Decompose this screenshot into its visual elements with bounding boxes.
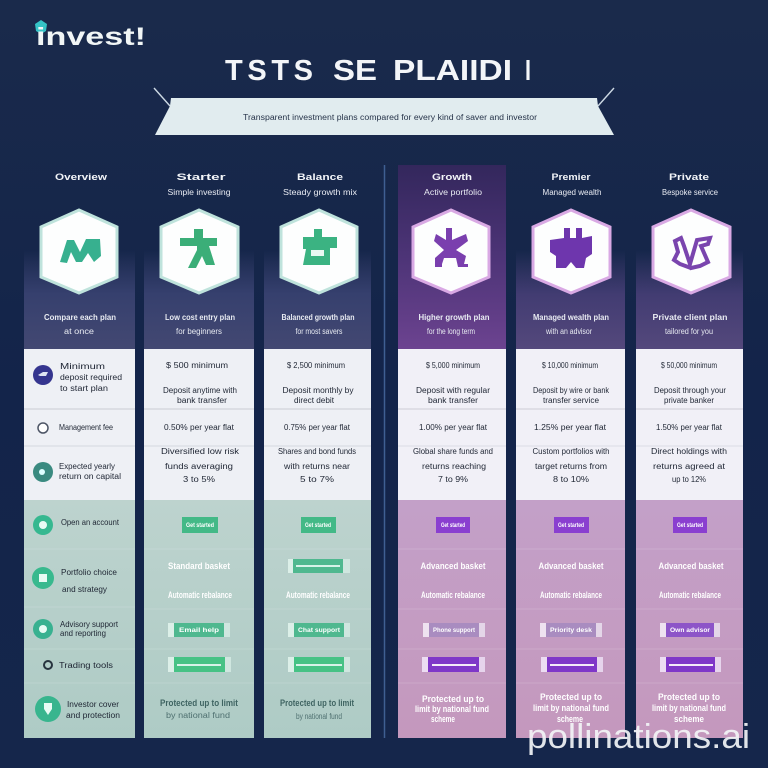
column heading: Starter <box>176 172 226 182</box>
plan values: 5 to 7% <box>300 475 334 484</box>
header description: for most savers <box>296 327 342 336</box>
plan values: 8 to 10% <box>553 475 589 484</box>
tinted values <box>420 561 486 600</box>
plan values: funds averaging <box>165 462 233 471</box>
plan values: Deposit anytime with <box>163 386 237 395</box>
header description: for beginners <box>176 327 222 336</box>
protection note: scheme <box>557 714 583 724</box>
plan values: 1.00% per year flat <box>419 423 488 432</box>
column heading <box>168 172 230 197</box>
header description: for the long term <box>427 327 475 336</box>
header description: Private client plan <box>652 313 728 322</box>
row label: returns: Expected yearly <box>59 462 115 471</box>
column: plan 4 (highlighted) <box>398 165 506 738</box>
chip: tools <box>660 657 721 672</box>
button <box>554 517 589 533</box>
column heading <box>662 172 719 197</box>
plan values: direct debit <box>294 396 335 405</box>
row label: protection: Investor cover <box>67 700 119 709</box>
column heading: Simple investing <box>168 188 230 197</box>
row label: protection: and protection <box>66 711 120 720</box>
title: I <box>525 55 531 87</box>
button <box>436 517 470 533</box>
protection note <box>280 698 354 721</box>
title: PLAIIDI <box>393 55 512 87</box>
column: plan 3 <box>264 172 371 738</box>
plan values: Deposit monthly by <box>282 386 354 395</box>
row label: tools <box>44 661 113 670</box>
chip: support <box>168 623 230 637</box>
hexagon icon <box>413 210 489 293</box>
header description: tailored for you <box>665 327 713 336</box>
header description <box>44 313 116 336</box>
protection note: Protected up to <box>422 694 484 704</box>
chip: basket <box>288 559 350 573</box>
plan values <box>651 361 727 484</box>
column heading: Active portfolio <box>424 188 483 197</box>
plan values: private banker <box>664 396 714 405</box>
plan values: 7 to 9% <box>438 475 468 484</box>
header description: Balanced growth plan <box>282 313 355 322</box>
logo wordmark: invest! <box>36 23 146 51</box>
row label: risk: Portfolio choice <box>61 568 118 577</box>
row label: tools: Trading tools <box>59 661 113 670</box>
header description <box>165 313 235 336</box>
plan values: bank transfer <box>177 396 227 405</box>
title: SE <box>333 55 377 87</box>
header description: Higher growth plan <box>418 313 490 322</box>
hexagon icon <box>161 210 238 293</box>
row label: support: and reporting <box>60 629 106 638</box>
header description <box>533 313 609 336</box>
chip: support <box>540 623 602 637</box>
header description <box>418 313 490 336</box>
tinted values <box>658 561 724 600</box>
plan values: Custom portfolios with <box>532 447 610 456</box>
tinted values: Automatic rebalance <box>421 590 485 600</box>
row label: returns: return on capital <box>59 472 121 481</box>
header description: Low cost entry plan <box>165 313 235 322</box>
protection note: Protected up to limit <box>280 698 354 708</box>
watermark: pollinations.ai <box>527 718 750 756</box>
plan values <box>532 361 610 484</box>
chip: tools <box>168 657 231 672</box>
header description: with an advisor <box>545 327 592 336</box>
header description <box>652 313 728 336</box>
tinted values: Advanced basket <box>658 561 724 571</box>
plan values: Global share funds and <box>413 447 493 456</box>
button: Get started <box>677 523 703 529</box>
header description: Compare each plan <box>44 313 116 322</box>
plan values: 0.75% per year flat <box>284 423 351 432</box>
row label: returns <box>33 462 121 482</box>
button: Get started <box>186 523 214 529</box>
row label: fees <box>38 423 113 433</box>
plan values: Diversified low risk <box>161 447 240 456</box>
protection note: Protected up to limit <box>160 698 238 708</box>
row label: risk <box>32 567 118 594</box>
row label: risk: and strategy <box>62 585 107 594</box>
protection note <box>415 694 489 724</box>
chip: support <box>660 623 720 637</box>
column heading: Bespoke service <box>662 188 719 197</box>
column: plan features <box>24 172 135 738</box>
protection note <box>533 692 609 724</box>
header description: Managed wealth plan <box>533 313 609 322</box>
chip: support: Own advisor <box>670 628 711 634</box>
title <box>225 55 531 87</box>
row label: fees: Management fee <box>59 423 113 432</box>
column heading: Overview <box>55 172 108 182</box>
plan values: with returns near <box>283 462 350 471</box>
chip: tools <box>422 657 485 672</box>
header description: at once <box>64 327 95 336</box>
column heading <box>542 172 602 197</box>
tinted values: Advanced basket <box>420 561 486 571</box>
protection note: scheme <box>431 714 455 724</box>
subtitle ribbon <box>154 88 614 135</box>
ribbon caption: Transparent investment plans compared for every kind of saver and investor <box>243 113 537 122</box>
row label: protection <box>35 696 120 722</box>
chip: support <box>423 623 485 637</box>
plan values: returns agreed at <box>653 462 726 471</box>
protection note: scheme <box>674 714 704 724</box>
tinted values: Advanced basket <box>538 561 604 571</box>
plan values: $ 10,000 minimum <box>542 361 598 370</box>
hexagon icon <box>533 210 610 293</box>
plan values: $ 5,000 minimum <box>426 361 480 370</box>
logo <box>35 20 146 51</box>
tinted values: Standard basket <box>168 561 230 571</box>
plan values <box>278 361 356 484</box>
plan values: $ 50,000 minimum <box>661 361 717 370</box>
plan values: Direct holdings with <box>651 447 727 456</box>
column heading: Growth <box>432 172 472 182</box>
tinted values <box>168 561 232 600</box>
column heading: Steady growth mix <box>283 188 357 197</box>
protection note: by national fund <box>296 712 342 721</box>
button: Get started <box>441 523 465 529</box>
button: Get started <box>558 523 584 529</box>
plan values <box>413 361 493 484</box>
column heading: Private <box>669 172 709 182</box>
chip: tools <box>541 657 603 672</box>
plan values: 0.50% per year flat <box>164 423 235 432</box>
row label: minimum: to start plan <box>60 384 108 393</box>
chip: support: Chat support <box>298 628 340 634</box>
chip: support: Phone support <box>433 628 475 634</box>
button <box>673 517 707 533</box>
plan values <box>161 361 240 484</box>
column: plan 2 <box>144 172 254 738</box>
row label: minimum: deposit required <box>60 373 122 382</box>
header description <box>282 313 355 336</box>
protection note <box>160 698 238 720</box>
row label: support: Advisory support <box>60 620 119 629</box>
plan values: transfer service <box>543 396 600 405</box>
plan values: returns reaching <box>422 462 486 471</box>
plan values: Deposit with regular <box>416 386 490 395</box>
plan values: Deposit through your <box>654 386 726 395</box>
column heading: Premier <box>552 172 591 182</box>
column: plan 6 <box>636 172 743 738</box>
plan values: 1.25% per year flat <box>534 423 607 432</box>
plan values: $ 500 minimum <box>166 361 228 370</box>
column heading: Balance <box>297 172 343 182</box>
row label: minimum <box>33 362 122 393</box>
column heading: Managed wealth <box>542 188 602 197</box>
button: Get started <box>305 523 331 529</box>
tinted value: Automatic rebalance <box>286 590 350 600</box>
chip: support: Email help <box>179 628 219 634</box>
hexagon icon <box>41 210 117 293</box>
protection note: by national fund <box>166 711 230 720</box>
protection note: limit by national fund <box>415 704 489 714</box>
tinted values: Automatic rebalance <box>659 590 721 600</box>
row label: access: Open an account <box>61 518 120 527</box>
chip: tools <box>288 657 350 672</box>
row label: minimum: Minimum <box>60 362 105 371</box>
plan values: 3 to 5% <box>183 475 215 484</box>
plan values: Deposit by wire or bank <box>533 386 610 395</box>
plan values: target returns from <box>535 462 607 471</box>
column: plan 5 <box>516 172 625 738</box>
title: TSTS <box>225 55 313 87</box>
tinted values: Automatic rebalance <box>540 590 602 600</box>
protection note: limit by national fund <box>533 703 609 713</box>
row label: access <box>33 515 120 535</box>
column heading <box>283 172 357 197</box>
tinted values <box>538 561 604 600</box>
protection note: Protected up to <box>540 692 602 702</box>
button <box>301 517 336 533</box>
protection note: limit by national fund <box>652 703 726 713</box>
column heading <box>424 172 483 197</box>
icon: teal gem <box>35 20 47 34</box>
hexagon icon <box>653 210 730 293</box>
button <box>182 517 218 533</box>
hexagon icon <box>281 210 357 293</box>
divider between plan groups <box>384 165 386 738</box>
plan values: Shares and bond funds <box>278 447 356 456</box>
chip: support: Priority desk <box>550 628 593 634</box>
plan values: 1.50% per year flat <box>656 423 723 432</box>
plan values: bank transfer <box>428 396 478 405</box>
tinted values: Automatic rebalance <box>168 590 232 600</box>
chip: support <box>288 623 350 637</box>
protection note <box>652 692 726 724</box>
plan values: up to 12% <box>672 475 706 484</box>
plan values: $ 2,500 minimum <box>287 361 345 370</box>
row label: support <box>33 619 119 639</box>
protection note: Protected up to <box>658 692 720 702</box>
